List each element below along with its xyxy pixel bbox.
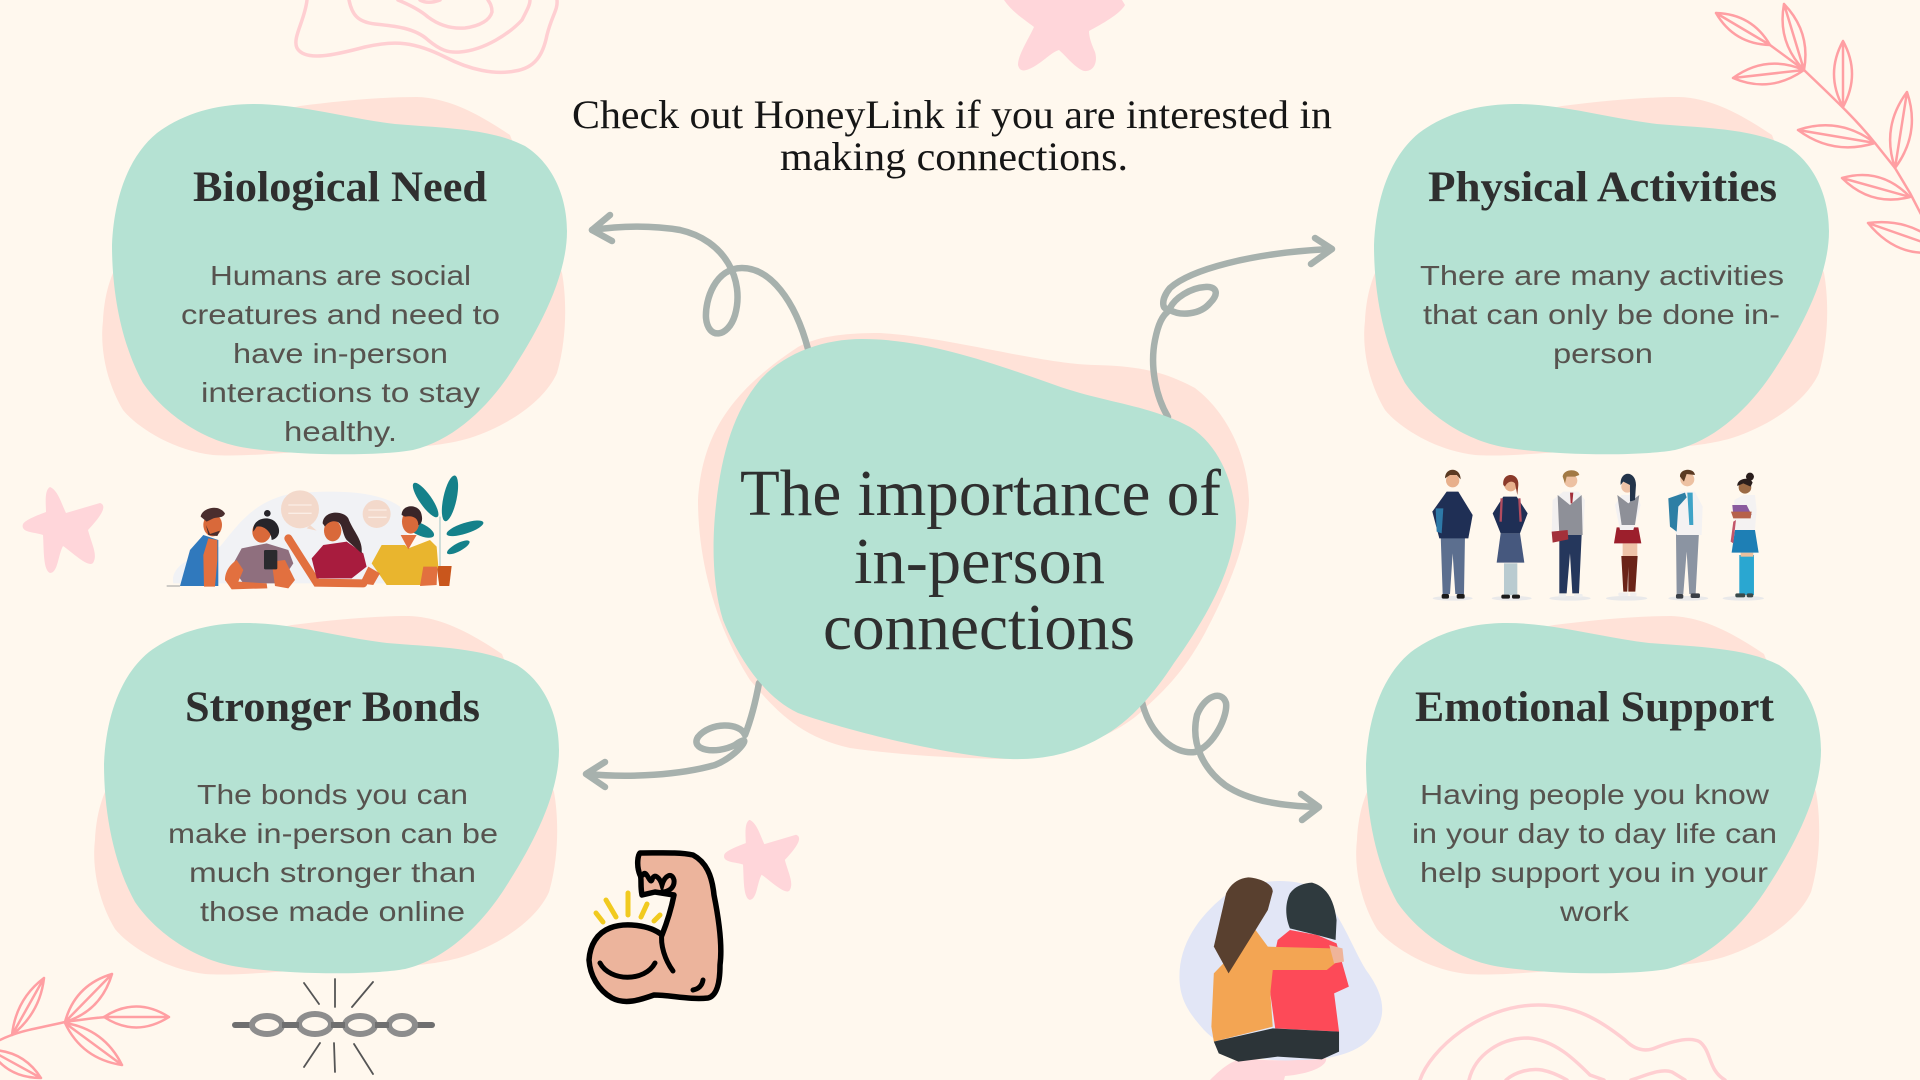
- text: stronger bonds body: much stronger than: [189, 857, 476, 888]
- arrow: centre to physical activities: [1153, 238, 1332, 417]
- panel: centre topic: [714, 339, 1236, 759]
- subtitle: making connections.: [780, 134, 1128, 179]
- heading: biological need: Biological Need: [193, 164, 487, 211]
- decoration: bottom right swirl: [1420, 1005, 1725, 1080]
- subtitle: [572, 92, 1332, 179]
- panel: biological need: [102, 97, 567, 456]
- decoration: bottom left branch: [0, 974, 169, 1078]
- text: emotional support body: help support you in your: [1420, 857, 1768, 888]
- icon: flexed arm: [589, 853, 721, 1001]
- student 2: [1493, 475, 1528, 599]
- panel: physical activities: [1364, 97, 1829, 456]
- text: emotional support body: [1412, 779, 1777, 927]
- illustration: people talking at a table: [167, 474, 485, 589]
- text: stronger bonds body: The bonds you can: [197, 779, 468, 810]
- heading: physical activities: Physical Activities: [1428, 164, 1777, 211]
- arrow: centre to emotional support: [1142, 696, 1319, 820]
- icon: chain: [235, 979, 432, 1074]
- student 5: [1668, 470, 1703, 599]
- text: physical activities body: that can only be done in-: [1423, 299, 1780, 330]
- text: stronger bonds body: [168, 779, 498, 927]
- decoration: top star: [1004, 0, 1125, 71]
- text: stronger bonds body: make in-person can be: [168, 818, 498, 849]
- text: physical activities body: There are many activities: [1420, 260, 1784, 291]
- text: physical activities body: person: [1553, 338, 1653, 369]
- text: stronger bonds body: those made online: [200, 896, 465, 927]
- text: biological need body: interactions to stay: [201, 377, 480, 408]
- student 1: [1432, 470, 1473, 599]
- student 3: [1552, 470, 1585, 597]
- illustration: two friends hugging: [1179, 877, 1382, 1062]
- subtitle: Check out HoneyLink if you are interested in: [572, 92, 1332, 137]
- decoration: top swirl: [296, 0, 557, 72]
- text: biological need body: creatures and need to: [181, 299, 500, 330]
- text: biological need body: healthy.: [284, 416, 397, 447]
- title: [740, 457, 1221, 664]
- heading: emotional support: Emotional Support: [1415, 684, 1775, 731]
- text: biological need body: [181, 260, 500, 447]
- title: The importance of: [740, 457, 1221, 530]
- text: physical activities body: [1420, 260, 1784, 369]
- text: biological need body: have in-person: [233, 338, 448, 369]
- decoration: bottom star: [1210, 1058, 1326, 1080]
- title: in-person: [854, 525, 1105, 598]
- text: biological need body: Humans are social: [210, 260, 471, 291]
- panel: emotional support: [1356, 616, 1821, 975]
- arrow: centre to stronger bonds: [586, 683, 759, 787]
- arrow: centre to biological need: [592, 215, 808, 349]
- panel: centre backing blob: [698, 333, 1249, 759]
- student 4: [1614, 474, 1641, 596]
- text: emotional support body: in your day to day life can: [1412, 818, 1777, 849]
- panel: stronger bonds: [94, 616, 559, 975]
- decoration: left star: [23, 487, 103, 573]
- title: connections: [823, 591, 1135, 664]
- decoration: top right branch: [1716, 4, 1920, 253]
- heading: stronger bonds: Stronger Bonds: [185, 684, 480, 731]
- decoration: star near arm: [724, 820, 799, 900]
- text: emotional support body: work: [1559, 896, 1630, 927]
- illustration: six students in uniform: [1432, 470, 1764, 601]
- student 6: [1731, 473, 1759, 597]
- text: emotional support body: Having people you know: [1420, 779, 1770, 810]
